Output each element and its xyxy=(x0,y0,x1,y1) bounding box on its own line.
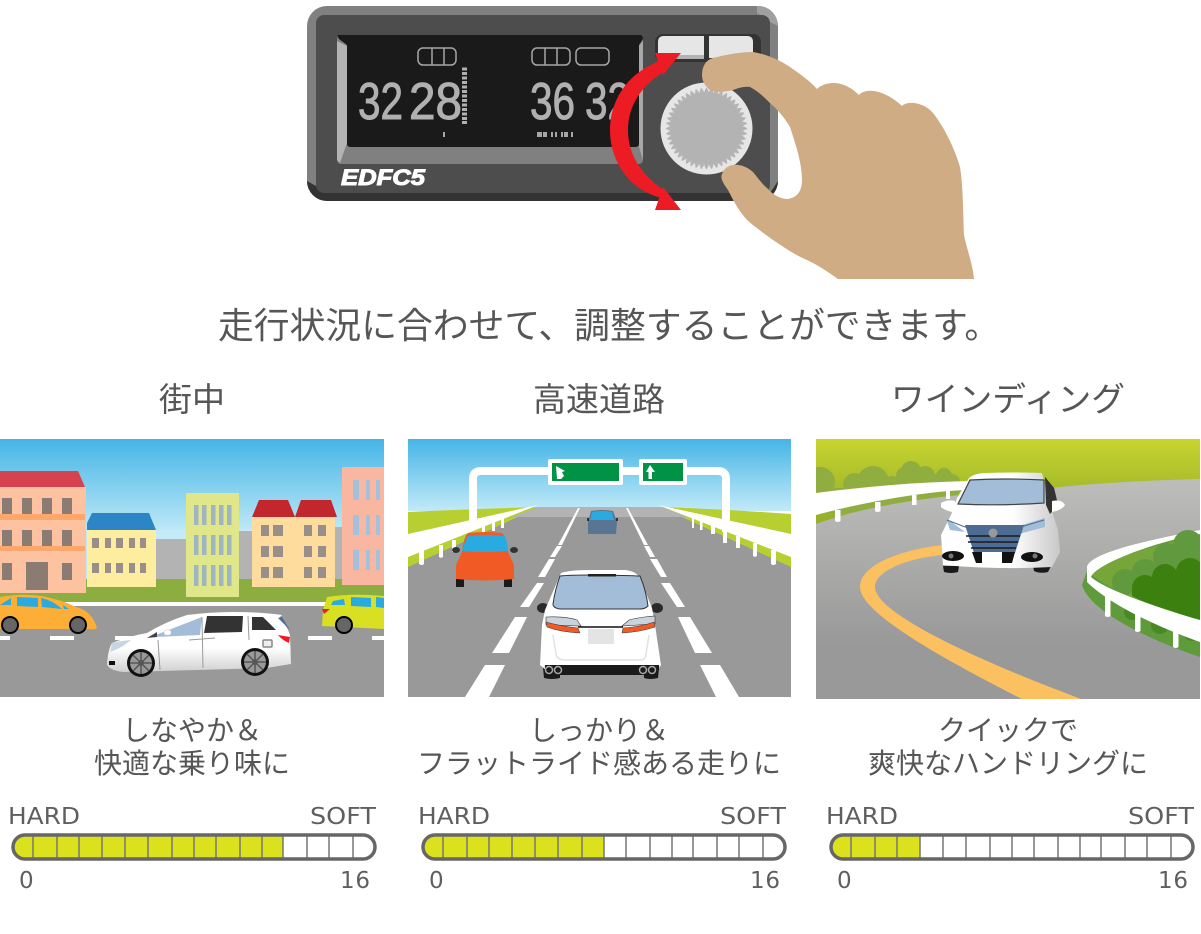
car: orange taxi xyxy=(0,595,97,634)
gauge: expressway, setting 8: SOFT xyxy=(720,802,787,830)
caption: city xyxy=(94,715,290,779)
column heading: city: 街中 xyxy=(159,381,225,418)
building: salmon xyxy=(0,471,86,593)
car: white rear view xyxy=(537,570,663,679)
road centre line xyxy=(860,545,1081,699)
gauge: winding, setting 4: SOFT xyxy=(1128,802,1195,830)
caption: city: 快適な乗り味に xyxy=(94,748,290,779)
guardrails xyxy=(408,505,791,565)
road dashes xyxy=(0,636,384,640)
scene: winding road xyxy=(805,439,1201,699)
display readout left: 28 xyxy=(409,73,462,131)
gauge: expressway, setting 8: HARD xyxy=(418,802,490,830)
display readout left: 32 xyxy=(358,73,403,131)
controller body xyxy=(307,6,778,201)
rotate arrow xyxy=(610,53,681,210)
gauge: city, setting 12: SOFT xyxy=(310,802,377,830)
gauge: expressway, setting 8: 0 xyxy=(429,868,444,894)
caption: city: しなやか＆ xyxy=(122,715,262,746)
gauge: winding, setting 4: 0 xyxy=(837,868,852,894)
scene: city street xyxy=(0,439,384,697)
building: yellow xyxy=(87,513,156,587)
lane markings xyxy=(465,508,739,697)
display readout right xyxy=(530,73,630,131)
gauge: expressway, setting 8 xyxy=(418,802,787,894)
right island with bushes xyxy=(1082,530,1201,657)
display icons xyxy=(418,48,609,65)
knob xyxy=(660,82,752,174)
caption: expressway xyxy=(417,715,781,779)
car: white minivan side view xyxy=(107,612,291,677)
car: yellow xyxy=(322,595,384,634)
caption: winding: クイックで xyxy=(938,715,1078,746)
car: orange xyxy=(452,532,518,587)
building: tall green-yellow xyxy=(186,493,239,597)
gauge: expressway, setting 8: 16 xyxy=(750,868,780,894)
far bushes xyxy=(805,461,966,513)
scene: expressway xyxy=(408,439,791,697)
gauge: winding, setting 4: HARD xyxy=(826,802,898,830)
hand xyxy=(702,52,974,279)
gauge: city, setting 12: 16 xyxy=(340,868,370,894)
caption: winding: 爽快なハンドリングに xyxy=(868,748,1148,779)
display readout left xyxy=(358,73,462,131)
column heading: expressway: 高速道路 xyxy=(533,381,665,418)
device: EDFC5 controller with hand xyxy=(307,6,974,279)
gauge: city, setting 12 xyxy=(8,802,377,894)
gauge: winding, setting 4: 16 xyxy=(1158,868,1188,894)
car: blue xyxy=(587,510,618,534)
caption: expressway: しっかり＆ xyxy=(529,715,669,746)
display xyxy=(337,35,643,164)
display readout right: 36 xyxy=(530,73,575,131)
gauge: winding, setting 4 xyxy=(826,802,1195,894)
building: orange xyxy=(252,500,337,587)
display readout right: 32 xyxy=(585,73,630,131)
overhead gantry xyxy=(473,459,726,532)
gauge: city, setting 12: 0 xyxy=(19,868,34,894)
caption: expressway: フラットライド感ある走りに xyxy=(417,748,781,779)
road surface xyxy=(408,507,791,697)
gauge: city, setting 12: HARD xyxy=(8,802,80,830)
left guardrail xyxy=(816,481,970,522)
main heading: 走行状況に合わせて、調整することができます。 xyxy=(218,306,1000,346)
car: white front view xyxy=(941,472,1065,573)
column heading: winding: ワインディング xyxy=(891,381,1125,419)
buttons xyxy=(655,34,761,62)
logo: EDFC5 xyxy=(341,165,426,190)
road surface xyxy=(816,479,1200,699)
building: pink xyxy=(342,467,384,585)
caption: winding xyxy=(868,715,1148,779)
level meter xyxy=(462,68,467,124)
